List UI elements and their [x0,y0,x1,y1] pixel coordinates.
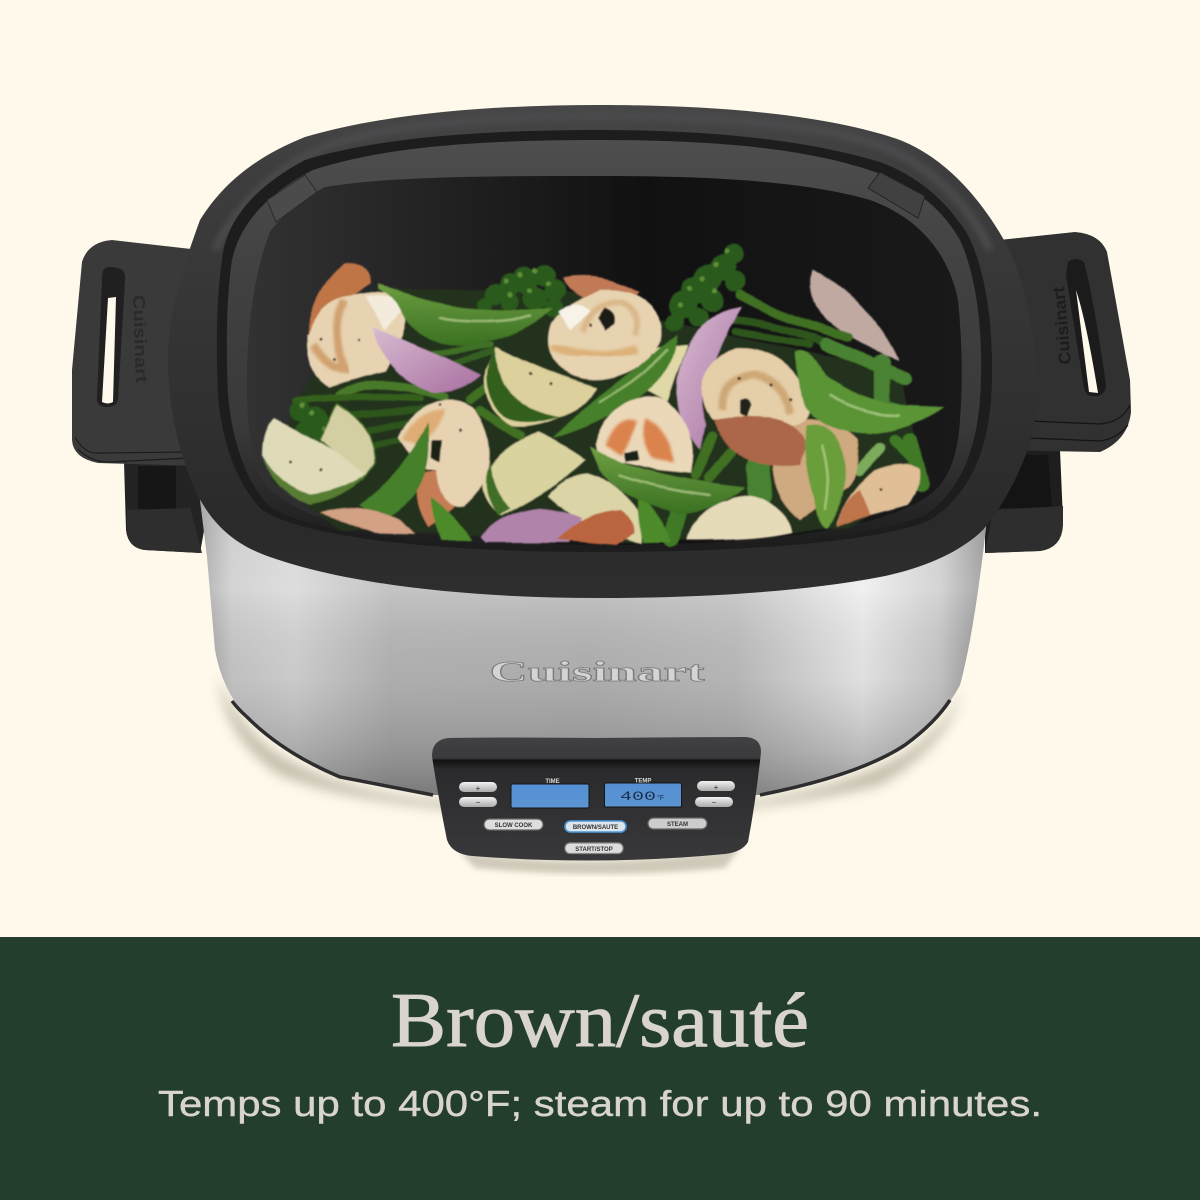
right lower bracket [985,450,1063,553]
plus and minus buttons: − [476,798,481,807]
steam button [648,818,707,829]
inner band [227,140,981,549]
left lower bracket [124,462,215,553]
shrimp bottom right [836,464,920,525]
heading: Brown/sauté [391,977,809,1063]
zucchini center [482,432,586,516]
zucchini center top [485,347,596,426]
plus and minus buttons: + [714,783,719,792]
start/stop button [565,843,623,854]
pepper flecks [289,324,881,491]
start/stop button: START/STOP [575,847,613,853]
pod horizontal center [590,447,745,514]
shrimp white bottom [688,495,792,540]
dark food base [270,290,925,543]
shrimp center right [701,348,810,467]
time label: TIME [545,779,560,785]
stainless body [200,500,988,795]
shallot [810,268,898,360]
shrimp top center [549,276,663,380]
food [262,245,945,545]
left handle [72,240,200,466]
handle logo: Cuisinart [129,294,151,383]
rim tabs [267,172,925,222]
top lip highlight [215,116,990,250]
right handle [990,232,1131,452]
temp label: TEMP [635,778,651,784]
pod highlights [440,316,900,510]
temp unit: °F [657,794,664,802]
pale zucchini behind [646,345,688,402]
control panel [432,737,761,874]
background [0,0,1200,937]
plus and minus buttons [459,781,735,807]
broccolini [290,245,745,451]
product: multicooker [72,105,1131,874]
slow cook button [484,819,543,830]
pod left [360,423,429,520]
plus and minus buttons: − [712,798,717,807]
slow cook button: SLOW COOK [495,823,533,829]
small pod bottom left [430,497,472,541]
shrimp center left [398,400,489,528]
handle logo: Cuisinart [1049,286,1075,365]
steam button: STEAM [667,822,688,828]
stems and beans [295,295,922,538]
temp display [604,783,682,807]
onion center [677,307,742,450]
brown/saute button: BROWN/SAUTE [573,825,618,831]
pod right [795,351,945,434]
soft ground shadow [218,677,962,815]
plus and minus buttons: + [476,784,481,793]
inner groove [217,130,992,552]
zucchini center top skin [487,348,560,421]
zucchini back left [320,403,376,480]
zucchini front left [262,418,365,505]
sugar snap pod upper left [378,282,552,346]
time display [511,784,589,808]
zucchini bottom center [548,473,642,543]
shrimp bottom center [556,510,634,545]
shrimp bottom left [320,508,415,535]
onion upper left [373,327,482,392]
shrimp back right [773,419,859,520]
pod bottom center [638,492,672,542]
subheading: Temps up to 400°F; steam for up to 90 minutes. [158,1083,1042,1124]
temp readout: 400 [620,789,656,804]
pod vertical right [805,424,846,530]
cavity [247,176,962,545]
brand logo on body: Cuisinart [490,656,705,688]
onion bottom [480,508,582,543]
shrimp top left [306,263,404,388]
pod diagonal center [552,335,678,438]
shrimp center orange [596,397,693,473]
caption band [0,937,1200,1200]
outer rim [168,105,1037,598]
brown/saute button [565,821,626,832]
